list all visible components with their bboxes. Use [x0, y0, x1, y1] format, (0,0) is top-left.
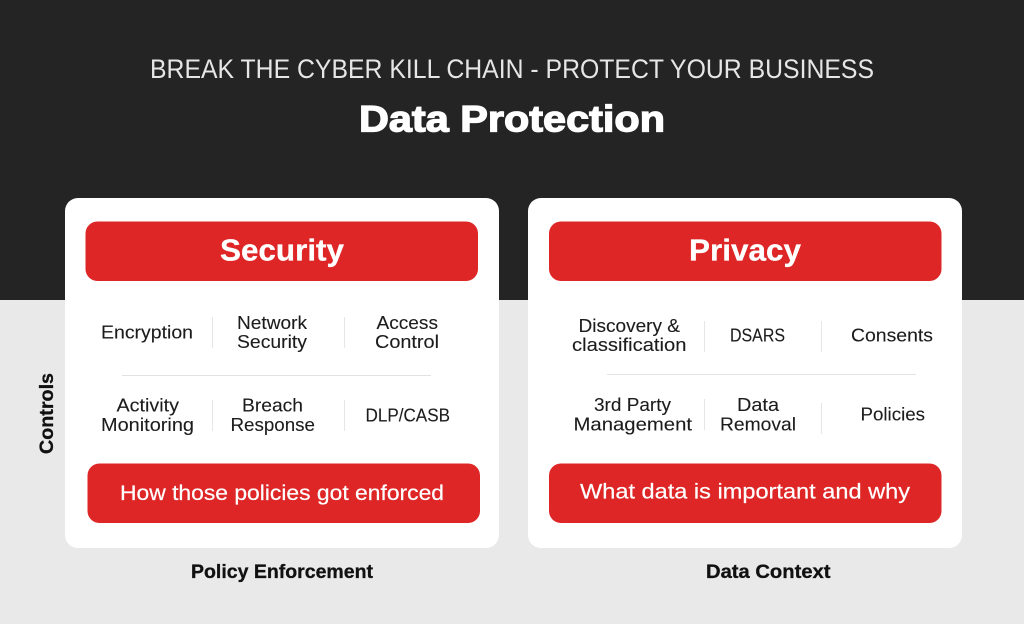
- privacy controls grid: classification: [572, 334, 686, 355]
- security heading bar: [86, 222, 478, 281]
- security controls grid: Response: [230, 414, 315, 435]
- security controls grid: Control: [375, 331, 439, 352]
- privacy controls grid: [572, 315, 933, 434]
- privacy controls grid: 3rd Party: [594, 394, 672, 415]
- security controls grid: Monitoring: [101, 414, 194, 435]
- security footer bar: How those policies got enforced: [120, 482, 444, 505]
- panel: privacy: [528, 198, 962, 548]
- vertical axis label: Controls: Controls: [37, 373, 58, 454]
- security controls grid: Encryption: [101, 322, 193, 342]
- privacy footer bar: What data is important and why: [580, 480, 911, 504]
- privacy controls grid: Management: [574, 414, 692, 434]
- security controls grid: Access: [376, 312, 438, 333]
- security controls grid: Breach: [242, 394, 303, 416]
- privacy controls grid: Removal: [720, 414, 796, 434]
- privacy controls grid: Data: [737, 394, 780, 415]
- security controls grid: Activity: [116, 394, 180, 416]
- title: Data Protection: Data Protection: [359, 98, 665, 140]
- dark header band: [0, 0, 1024, 300]
- security controls grid: Network: [237, 312, 308, 333]
- privacy heading bar: [549, 222, 942, 281]
- security controls grid: DLP/CASB: [366, 404, 450, 426]
- privacy controls grid: Discovery &: [578, 315, 681, 336]
- title: subtitle line: BREAK THE CYBER KILL CHAIN - PROTECT YOUR BUSINESS: [150, 54, 874, 84]
- privacy controls grid: DSARS: [730, 324, 785, 346]
- axis label: Data Context: Data Context: [706, 562, 831, 583]
- axis label: Policy Enforcement: Policy Enforcement: [191, 562, 374, 583]
- security controls grid: Security: [237, 331, 308, 352]
- privacy controls grid: Policies: [860, 404, 925, 424]
- security heading bar: Security: [220, 232, 345, 268]
- security controls grid: [101, 312, 450, 435]
- privacy footer bar: [549, 464, 942, 523]
- privacy controls grid: Consents: [851, 324, 933, 346]
- privacy heading bar: Privacy: [689, 232, 802, 268]
- security footer bar: [88, 464, 480, 523]
- panel: security: [65, 198, 499, 548]
